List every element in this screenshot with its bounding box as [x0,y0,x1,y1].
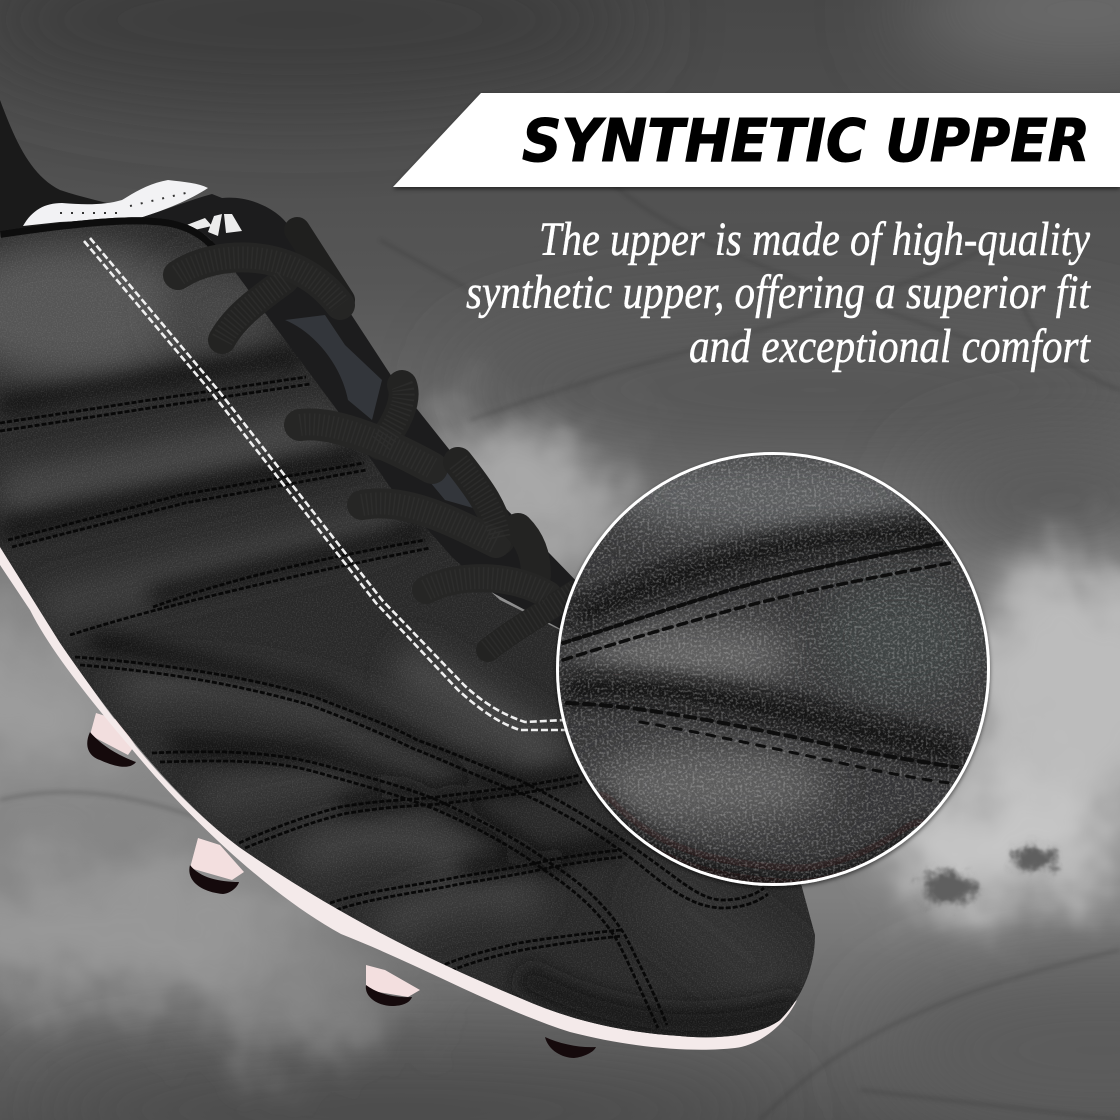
banner [393,93,1120,187]
close-up shading [560,455,980,885]
tongue inner strip [285,315,480,510]
tongue logo [184,214,242,236]
perforated white lining [23,180,208,226]
description text [466,213,1091,373]
boot heel collar [0,100,150,260]
leather grain [0,224,815,1037]
dark cloud spots [922,845,1054,905]
football boot [0,100,815,1058]
flat laces [178,230,575,650]
black seams [0,377,768,1028]
fog patches [0,430,1120,1040]
banner shape [393,93,1120,187]
studs [87,713,596,1058]
white sole rim [0,545,797,1050]
white double stitching [84,238,565,730]
tongue [140,194,600,650]
collar piping [0,217,216,246]
leather highlights [0,240,800,1023]
leather upper body [0,217,815,1038]
zoom circle: leather close-up [555,452,993,889]
close-up seams [563,543,957,783]
close-up grain [559,455,987,883]
title: SYNTHETIC UPPER [522,106,1090,175]
